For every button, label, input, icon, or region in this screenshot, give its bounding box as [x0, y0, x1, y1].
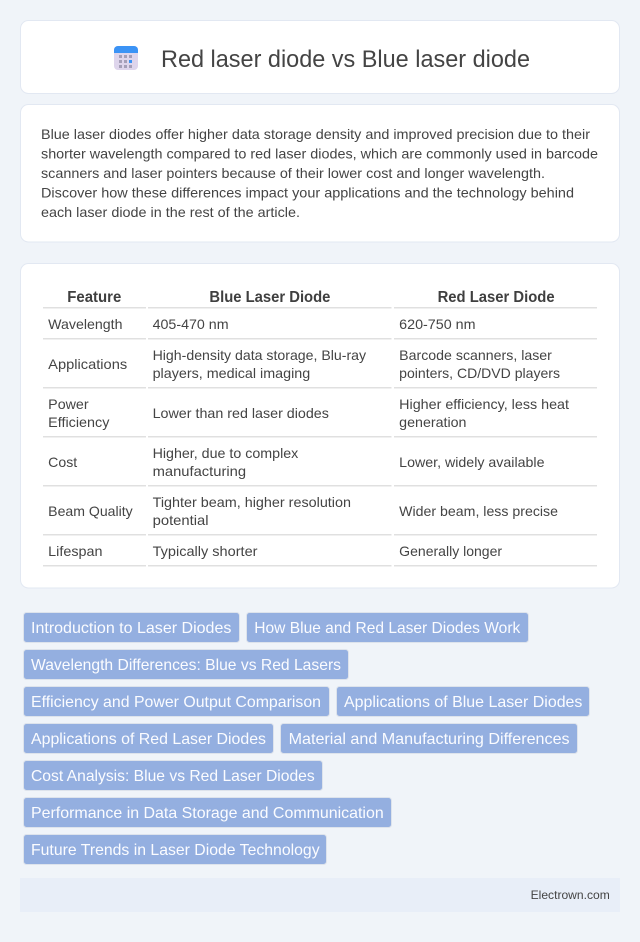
- panel: introduction: [20, 104, 620, 242]
- row: beam quality: potential: [153, 512, 209, 528]
- text block: introduction paragraph: each laser diode in the rest of the article.: [41, 204, 300, 220]
- tag: blue applications: [336, 686, 590, 716]
- tag: future trends: Future Trends in Laser Diode Technology: [31, 842, 320, 859]
- text block: introduction paragraph: Blue laser diodes offer higher data storage density and improved precision due to their: [41, 126, 590, 142]
- row: lifespan: Typically shorter: [153, 543, 258, 559]
- text block: introduction paragraph: shorter wavelength compared to red laser diodes, which are commonly used in barcode: [41, 146, 598, 162]
- row: wavelength: 620-750 nm: [399, 316, 476, 332]
- title: Red laser diode vs Blue laser diode: [161, 46, 530, 73]
- row: beam quality: Tighter beam, higher resolution: [153, 494, 351, 510]
- row: cost: Lower, widely available: [399, 454, 545, 470]
- tag: performance: [24, 798, 392, 828]
- row: wavelength: Wavelength: [48, 316, 123, 332]
- row: cost: Cost: [48, 454, 77, 470]
- row: lifespan: Generally longer: [399, 543, 502, 559]
- tag: efficiency: Efficiency and Power Output Comparison: [31, 694, 321, 711]
- row: cost: Higher, due to complex: [153, 445, 298, 461]
- row: applications: Applications: [48, 356, 127, 372]
- row: wavelength: 405-470 nm: [153, 316, 229, 332]
- icon: calendar: [114, 46, 138, 70]
- tag: wavelength differences: Wavelength Differences: Blue vs Red Lasers: [31, 657, 341, 674]
- tag: materials: [280, 724, 578, 754]
- row: power efficiency: Lower than red laser diodes: [153, 405, 329, 421]
- tag: cost analysis: Cost Analysis: Blue vs Red Laser Diodes: [31, 768, 315, 785]
- row: applications: High-density data storage, Blu-ray: [153, 347, 366, 363]
- row: applications: [48, 347, 560, 381]
- tag: red applications: [24, 724, 274, 754]
- tag: how they work: How Blue and Red Laser Diodes Work: [254, 620, 521, 637]
- tag: efficiency: [24, 686, 330, 716]
- footer: Electrown.com: [531, 888, 610, 902]
- tag: wavelength differences: [24, 650, 348, 680]
- table header: Red Laser Diode: [438, 289, 555, 306]
- row: beam quality: [48, 494, 558, 528]
- row: power efficiency: Power: [48, 396, 89, 412]
- table header: [67, 289, 555, 306]
- text block: introduction paragraph: Discover how these differences impact your applications and the technology behind: [41, 184, 574, 200]
- tag: materials: Material and Manufacturing Differences: [289, 731, 570, 748]
- row: power efficiency: generation: [399, 414, 466, 430]
- row: cost: [48, 445, 545, 479]
- tag: blue applications: Applications of Blue Laser Diodes: [344, 694, 582, 711]
- tag list: article sections: [24, 612, 590, 864]
- row: lifespan: [48, 543, 502, 559]
- tag: how they work: [246, 612, 528, 642]
- row: beam quality: Wider beam, less precise: [399, 503, 558, 519]
- row: power efficiency: [48, 396, 569, 430]
- footer: [20, 878, 620, 912]
- tag: cost analysis: [24, 760, 322, 790]
- table header: Feature: [67, 289, 121, 306]
- tag: introduction: [24, 612, 240, 642]
- tag: red applications: Applications of Red Laser Diodes: [31, 731, 266, 748]
- panel: comparison table: [20, 264, 620, 588]
- row: lifespan: Lifespan: [48, 543, 102, 559]
- text block: introduction paragraph: [41, 126, 598, 220]
- tag: performance: Performance in Data Storage and Communication: [31, 805, 384, 822]
- row: applications: pointers, CD/DVD players: [399, 365, 560, 381]
- panel: title card: [20, 20, 620, 94]
- row: cost: manufacturing: [153, 463, 246, 479]
- tag: future trends: [24, 834, 326, 864]
- row: wavelength: [48, 316, 475, 332]
- tag: introduction: Introduction to Laser Diodes: [31, 620, 231, 637]
- row: beam quality: Beam Quality: [48, 503, 133, 519]
- row: power efficiency: Efficiency: [48, 414, 109, 430]
- row: applications: Barcode scanners, laser: [399, 347, 552, 363]
- row: applications: players, medical imaging: [153, 365, 310, 381]
- text block: introduction paragraph: scanners and laser pointers because of their lower cost and longer wavelength.: [41, 165, 545, 181]
- row: power efficiency: Higher efficiency, less heat: [399, 396, 569, 412]
- table header: Blue Laser Diode: [209, 289, 330, 306]
